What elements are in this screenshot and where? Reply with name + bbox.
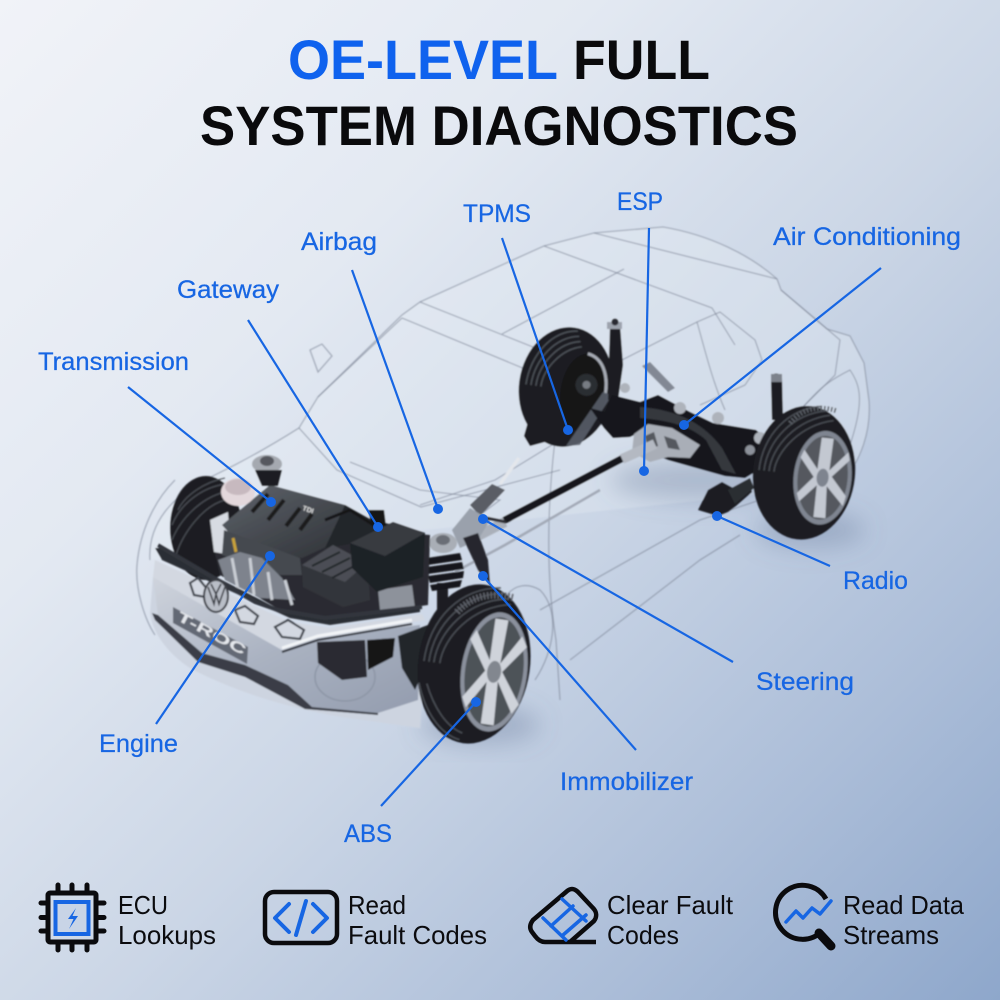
car illustration	[137, 227, 869, 751]
feature: ECU Lookups	[41, 885, 216, 950]
rear left shock absorber	[607, 318, 623, 400]
label: Air Conditioning: Air Conditioning	[773, 223, 961, 251]
label: Gateway: Gateway	[177, 276, 280, 304]
rear subframe	[590, 362, 766, 478]
callout: immobilizer	[478, 571, 636, 750]
callout: transmission	[128, 387, 276, 507]
wheel: front right	[407, 577, 541, 751]
air filter box	[302, 545, 370, 607]
callout: ESP	[639, 228, 649, 476]
title	[200, 28, 798, 157]
wheel: rear left	[511, 321, 621, 453]
label: Engine: Engine	[99, 730, 178, 758]
T-ROC plate	[173, 607, 249, 664]
label: Radio: Radio	[843, 567, 908, 595]
engine bay components	[210, 455, 430, 618]
engine bay components: TDI	[301, 505, 314, 515]
wheel: front left behind engine	[170, 476, 242, 580]
label: ESP: ESP	[617, 188, 663, 216]
label: Airbag: Airbag	[301, 228, 377, 256]
icon: eraser	[530, 889, 596, 942]
feature: ECU Lookups: ECU	[118, 890, 168, 920]
callout: engine	[156, 551, 275, 724]
system labels	[38, 188, 961, 848]
rear right shock absorber	[771, 374, 783, 420]
callout: gateway	[248, 320, 383, 532]
title: FULL	[573, 28, 710, 91]
callout: steering	[478, 514, 733, 662]
label: Transmission: Transmission	[38, 348, 189, 376]
feature: Read Data Streams: Read Data	[843, 890, 965, 920]
callout: air conditioning	[679, 268, 881, 430]
feature: Read Data Streams	[776, 885, 965, 950]
feature: Read Data Streams: Streams	[843, 920, 939, 950]
rear right suspension arm	[698, 478, 754, 516]
icon: code brackets	[265, 892, 337, 943]
T-ROC plate: T-ROC	[175, 608, 249, 658]
title: OE-LEVEL	[288, 28, 558, 91]
callout: ABS	[381, 697, 481, 806]
feature: Clear Fault Codes: Clear Fault	[607, 890, 734, 920]
prop shaft	[455, 444, 655, 572]
title: SYSTEM DIAGNOSTICS	[200, 94, 798, 157]
callout lines and dots	[128, 228, 881, 806]
label: TPMS: TPMS	[463, 200, 531, 228]
feature: Read Fault Codes: Read	[348, 890, 406, 920]
wheel: rear right	[746, 400, 862, 545]
shadows	[420, 460, 865, 745]
rear left brake and arm	[524, 392, 612, 446]
icon: magnifier with chart	[776, 885, 831, 946]
steering column	[452, 458, 519, 585]
icon: ECU chip	[41, 885, 104, 950]
callout: radio	[712, 511, 830, 566]
lower engine parts	[317, 625, 428, 690]
front grille	[153, 545, 425, 652]
feature: Read Fault Codes	[265, 890, 487, 950]
VW badge	[204, 580, 228, 612]
feature: Read Fault Codes: Fault Codes	[348, 920, 487, 950]
lower bumper and body	[150, 577, 425, 728]
callout: airbag	[352, 270, 443, 514]
battery box	[350, 510, 425, 592]
feature: ECU Lookups: Lookups	[118, 920, 216, 950]
car body outline	[137, 227, 869, 700]
label: ABS: ABS	[344, 820, 392, 848]
label: Steering: Steering	[756, 668, 854, 696]
front strut	[427, 533, 464, 613]
callout: TPMS	[502, 238, 573, 435]
feature: Clear Fault Codes	[530, 889, 734, 950]
label: Immobilizer: Immobilizer	[560, 768, 693, 796]
feature: Clear Fault Codes: Codes	[607, 920, 679, 950]
